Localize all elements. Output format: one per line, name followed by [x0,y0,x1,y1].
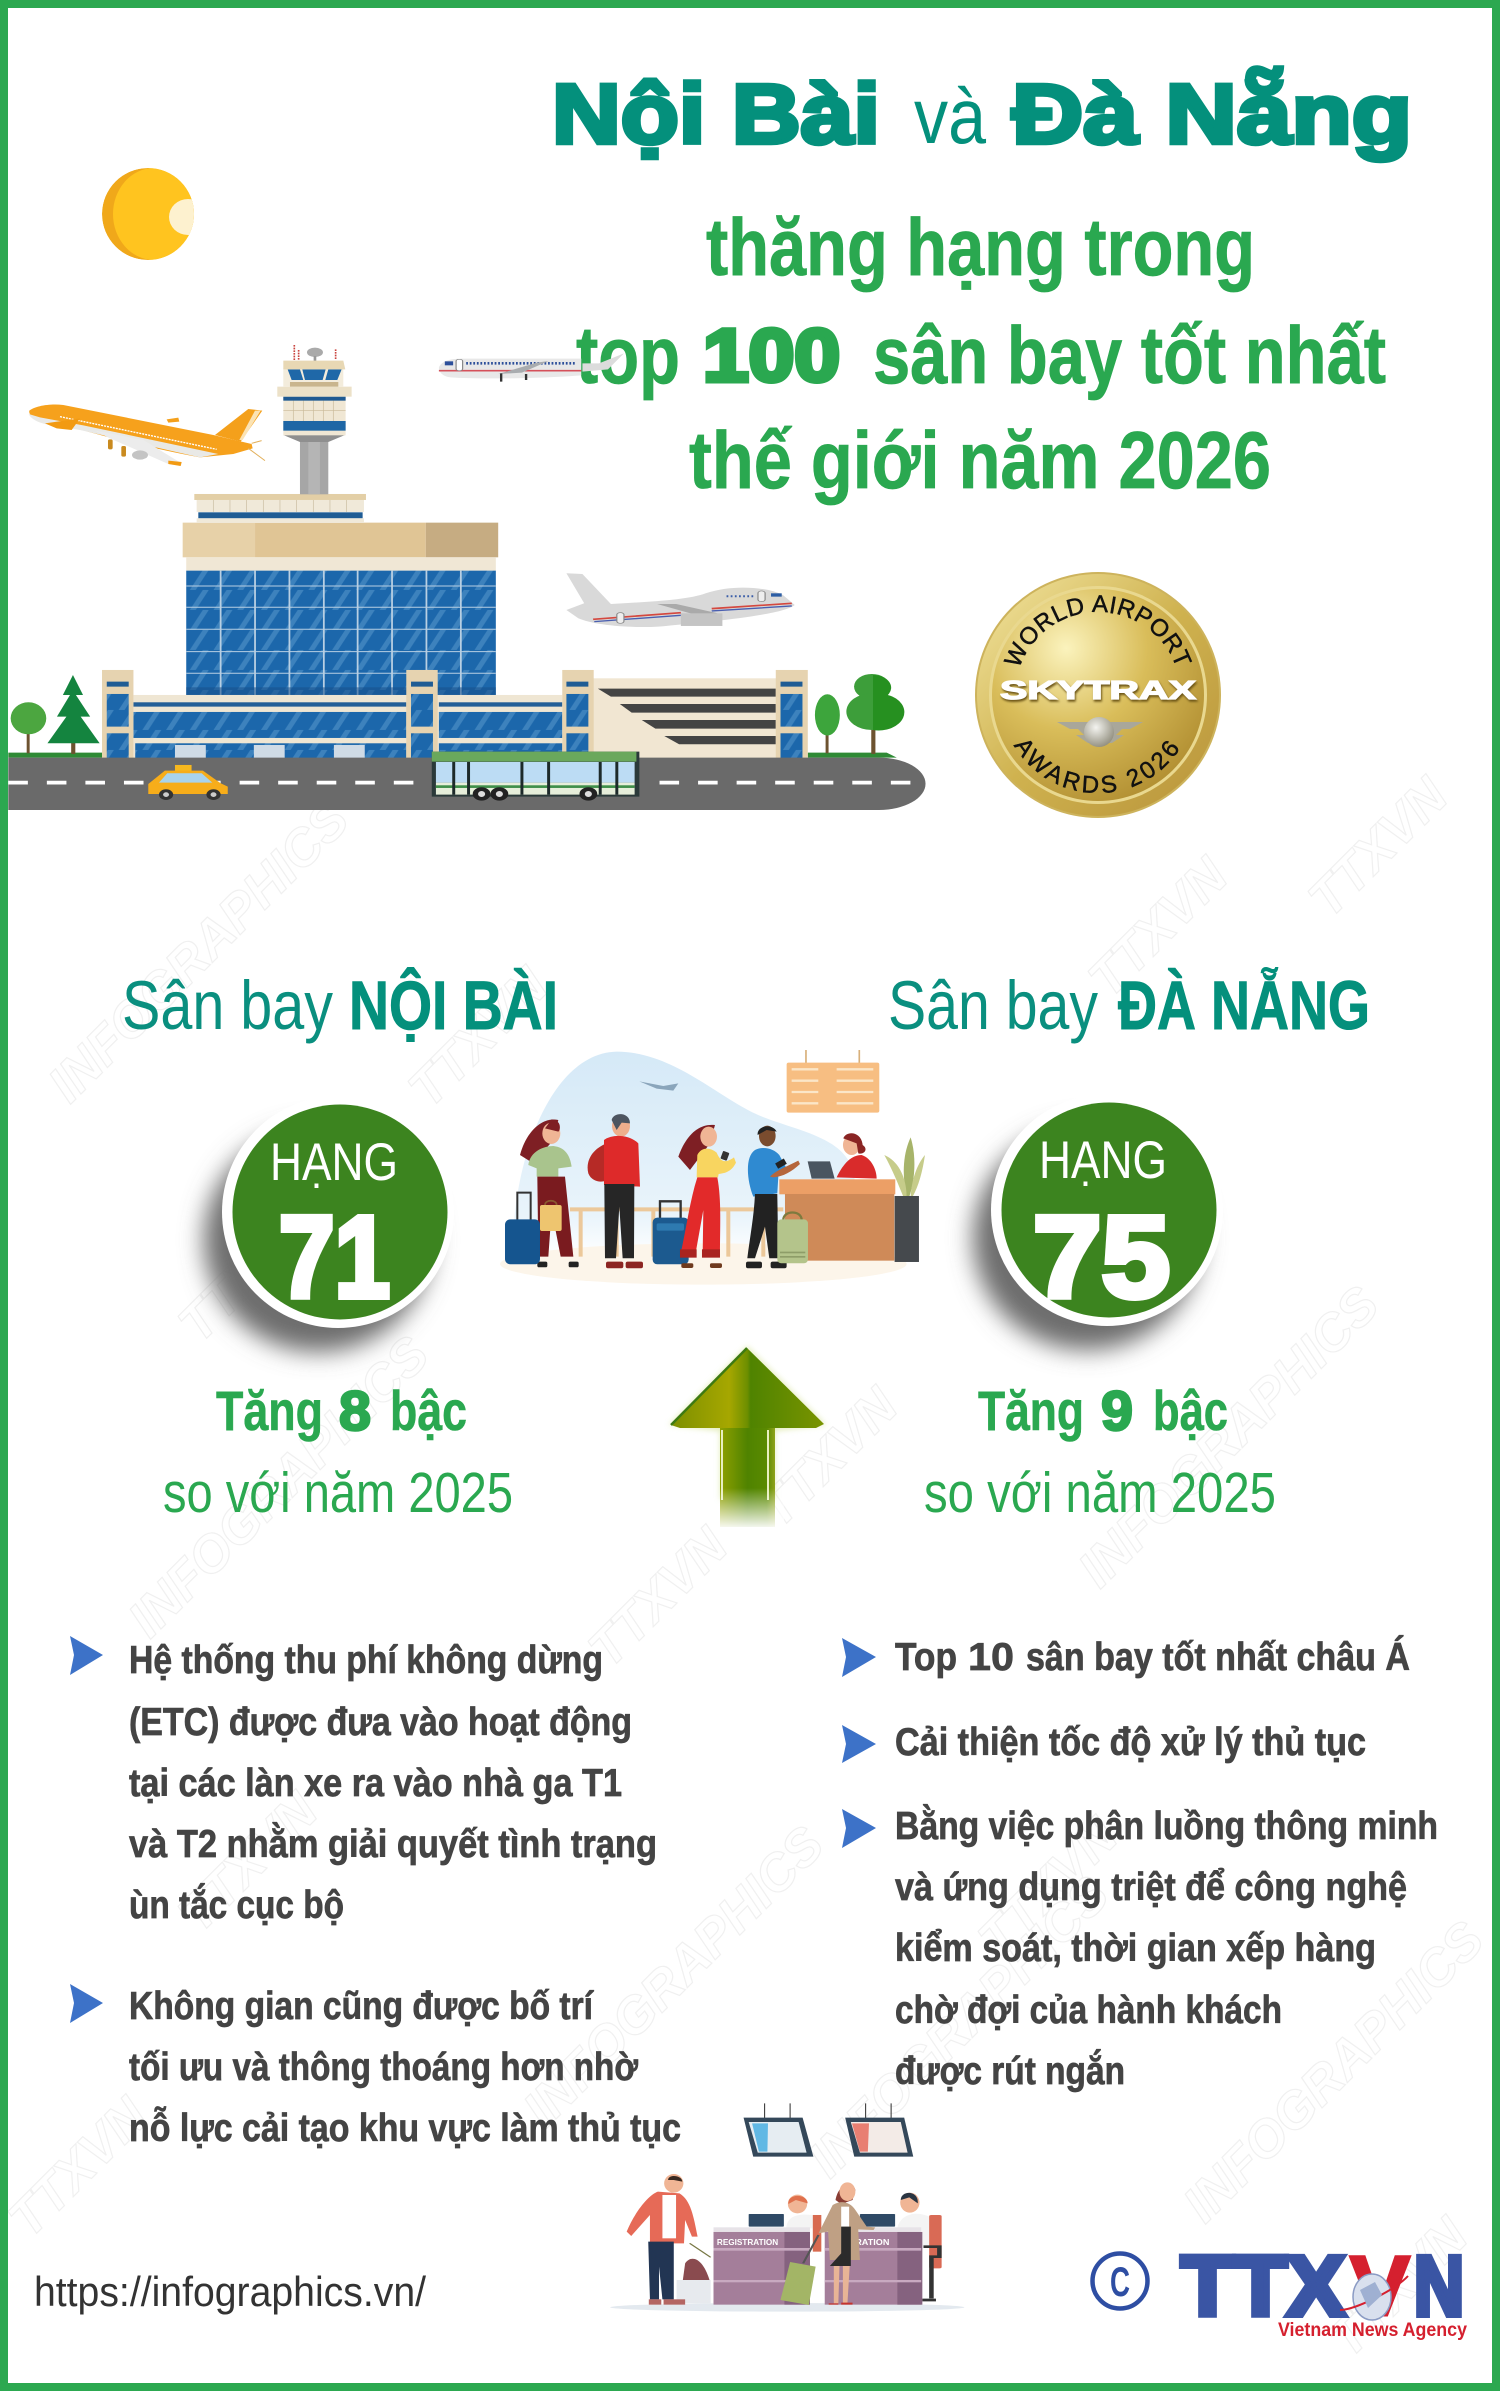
medal wings [1057,717,1143,747]
medal wordmark: SKYTRAX [1000,675,1197,705]
result text: Noi Bai: 8 [339,1379,371,1442]
text: INFOGRAPHICS [117,1325,441,1648]
suitcase blue 2 [653,1201,689,1264]
medal text top: WORLD AIRPORT [1003,595,1192,665]
rank circle: Da Nang 75 [973,1094,1223,1350]
logo: TTXVN: Vietnam News Agency [1278,2320,1467,2341]
text: TTXVN [1317,2206,1480,2368]
icon: bullet arrow [70,1636,103,1675]
bullet: top 10 [842,1635,1410,1679]
text: INFOGRAPHICS [1172,1910,1496,2233]
bullet text: nỗ lực cải tạo khu vực làm thủ tục [129,2106,681,2150]
heading: Noi Bai: NỘI BÀI [349,967,558,1044]
heading: Noi Bai: Sân bay [122,967,333,1044]
illustration: tower and orange plane [29,345,366,523]
bullet text: (ETC) được đưa vào hoạt động [129,1701,632,1744]
counter left [714,2227,810,2305]
icon: bullet arrow [70,1984,103,2023]
text: TTXVN [577,1516,740,1678]
result text: Noi Bai: bậc [390,1379,467,1442]
heading: Da Nang: Sân bay [888,967,1098,1044]
counter left: REGISTRATION [717,2237,778,2247]
subtitle: thăng hạng trong [706,203,1255,293]
icon: taxi [148,765,228,800]
check-in desk [779,1179,895,1261]
result text: Noi Bai: so với năm 2025 [163,1461,513,1525]
text: TTXVN [0,2086,160,2248]
heading: Noi Bai [122,967,558,1044]
luggage scale [677,2243,711,2303]
tower block [183,523,498,695]
bullet text [895,1804,1438,2093]
bullet text: tối ưu và thông thoáng hơn nhờ [129,2046,638,2089]
bullet text: Top [895,1636,957,1679]
title [552,67,1412,161]
agent with laptop [808,1133,877,1179]
bullet: space layout [70,1984,681,2150]
text: TTXVN [1077,846,1240,1008]
icon: silver plane [439,353,624,382]
medal text bottom: AWARDS 2026 [1013,740,1178,793]
green suitcase [780,2235,818,2305]
subtitle: 100 [703,314,840,397]
heading: Da Nang [888,967,1370,1044]
monitor left [744,2103,813,2157]
illustration: registration counters [610,2103,964,2312]
bullet text: tại các làn xe ra vào nhà ga T1 [129,1762,622,1805]
logo: TTXVN: V [1350,2239,1410,2333]
icon: bullet arrow [842,1725,876,1763]
control tower [277,345,352,494]
counter right [825,2227,922,2305]
icon: bullet arrow [842,1638,876,1677]
logo: TTXVN: TTX [1181,2239,1345,2333]
man in red jacket [627,2174,698,2305]
railing [570,1209,783,1257]
bullet text: Cải thiện tốc độ xử lý thủ tục [895,1721,1366,1764]
roof structure [194,494,366,523]
heading: Da Nang: ĐÀ NẴNG [1118,967,1370,1044]
logo: TTXVN [1181,2239,1467,2341]
bullet text [129,1985,681,2150]
bullet text: kiểm soát, thời gian xếp hàng [895,1927,1376,1970]
subtitle: sân bay tốt nhất [873,311,1386,401]
plant [884,1137,925,1262]
bullet: smart routing [842,1804,1438,2093]
result text: Noi Bai [163,1379,513,1525]
title: Nội Bài [552,67,880,161]
pillars [102,670,808,763]
bullet: procedure speed [842,1721,1366,1764]
illustration: passengers at check-in desk [500,1050,925,1285]
text: TTXVN [397,956,560,1118]
text: INFOGRAPHICS [512,1815,836,2138]
icon: sun [102,168,194,260]
icon: bullet arrow [842,1809,876,1848]
text: TTXVN [167,1191,330,1353]
icon: bus [432,752,639,801]
subtitle: thế giới năm 2026 [689,416,1271,506]
distant plane [639,1081,678,1091]
bullet text: Không gian cũng được bố trí [129,1985,594,2028]
pine tree [47,675,100,754]
text: TTXVN [1297,766,1460,928]
result text: Da Nang [924,1379,1276,1525]
title: và [914,72,987,160]
terminal wing [133,695,562,763]
bullet text: sân bay tốt nhất châu Á [1026,1635,1410,1679]
rank circle: Da Nang 75: 75 [1033,1192,1170,1322]
bullet text: được rút ngắn [895,2049,1125,2093]
bullet text: và ứng dụng triệt để công nghệ [895,1866,1407,1909]
source url: https://infographics.vn/ [34,2268,426,2315]
flight board [787,1050,879,1113]
road [8,758,926,810]
bullet text: và T2 nhằm giải quyết tình trạng [129,1822,657,1866]
result text: Da Nang: bậc [1153,1379,1228,1442]
rank circle: Noi Bai 71: 71 [279,1192,390,1322]
bullet text: chờ đợi của hành khách [895,1989,1282,2032]
icon: white plane [566,573,795,627]
person: man in red hoodie [588,1114,643,1268]
floor shadow [610,2303,964,2312]
result text: Noi Bai: Tăng [216,1379,323,1442]
bullet text [895,1635,1410,1679]
agent right [860,2193,942,2300]
bullet text: 10 [968,1636,1014,1679]
title: Đà Nẵng [1012,67,1412,161]
counter right: TRATION [850,2237,889,2247]
result text: Da Nang: Tăng [978,1379,1084,1442]
result text: Da Nang: so với năm 2025 [924,1461,1276,1525]
suitcase blue 1 [505,1193,540,1264]
text: INFOGRAPHICS [797,1865,1121,2188]
icon: orange plane [29,404,265,466]
agent left [749,2195,821,2252]
woman in beige coat [818,2182,875,2305]
tree right big [846,674,904,754]
result text: Da Nang: 9 [1101,1379,1133,1442]
copyright mark: C [1110,2258,1130,2305]
rank circle: Noi Bai 71: HẠNG [270,1133,398,1192]
person: man in blue [746,1126,800,1268]
text: TTXVN [967,1806,1130,1968]
person: woman in yellow [678,1125,736,1268]
subtitle [576,203,1386,506]
rank circle: Da Nang 75: HẠNG [1039,1131,1167,1190]
bullet text [129,1639,657,1927]
text: INFOGRAPHICS [37,790,361,1113]
text: TTXVN [167,1781,330,1943]
subtitle: top [576,311,680,401]
logo: TTXVN: N [1414,2239,1464,2333]
rank circle: Noi Bai 71 [204,1096,454,1352]
tree left [11,702,46,753]
floor [500,1243,907,1285]
text: TTXVN [747,1376,910,1538]
person: woman in green [520,1119,579,1267]
copyright mark [1092,2254,1148,2308]
car park [593,678,777,763]
badge: Skytrax medal [975,572,1221,818]
bullet text: Hệ thống thu phí không dừng [129,1639,603,1682]
grass [8,753,897,758]
suitcase green [777,1212,808,1263]
bullet: ETC toll system [70,1636,657,1927]
arrow up [669,1346,826,1530]
globe [1340,2274,1408,2320]
monitor right [845,2103,913,2157]
bullet text: ùn tắc cục bộ [129,1883,344,1927]
illustration: airport scene [8,353,926,810]
window backdrop [513,1052,855,1257]
tree right narrow [815,694,840,753]
text: INFOGRAPHICS [1067,1275,1391,1598]
